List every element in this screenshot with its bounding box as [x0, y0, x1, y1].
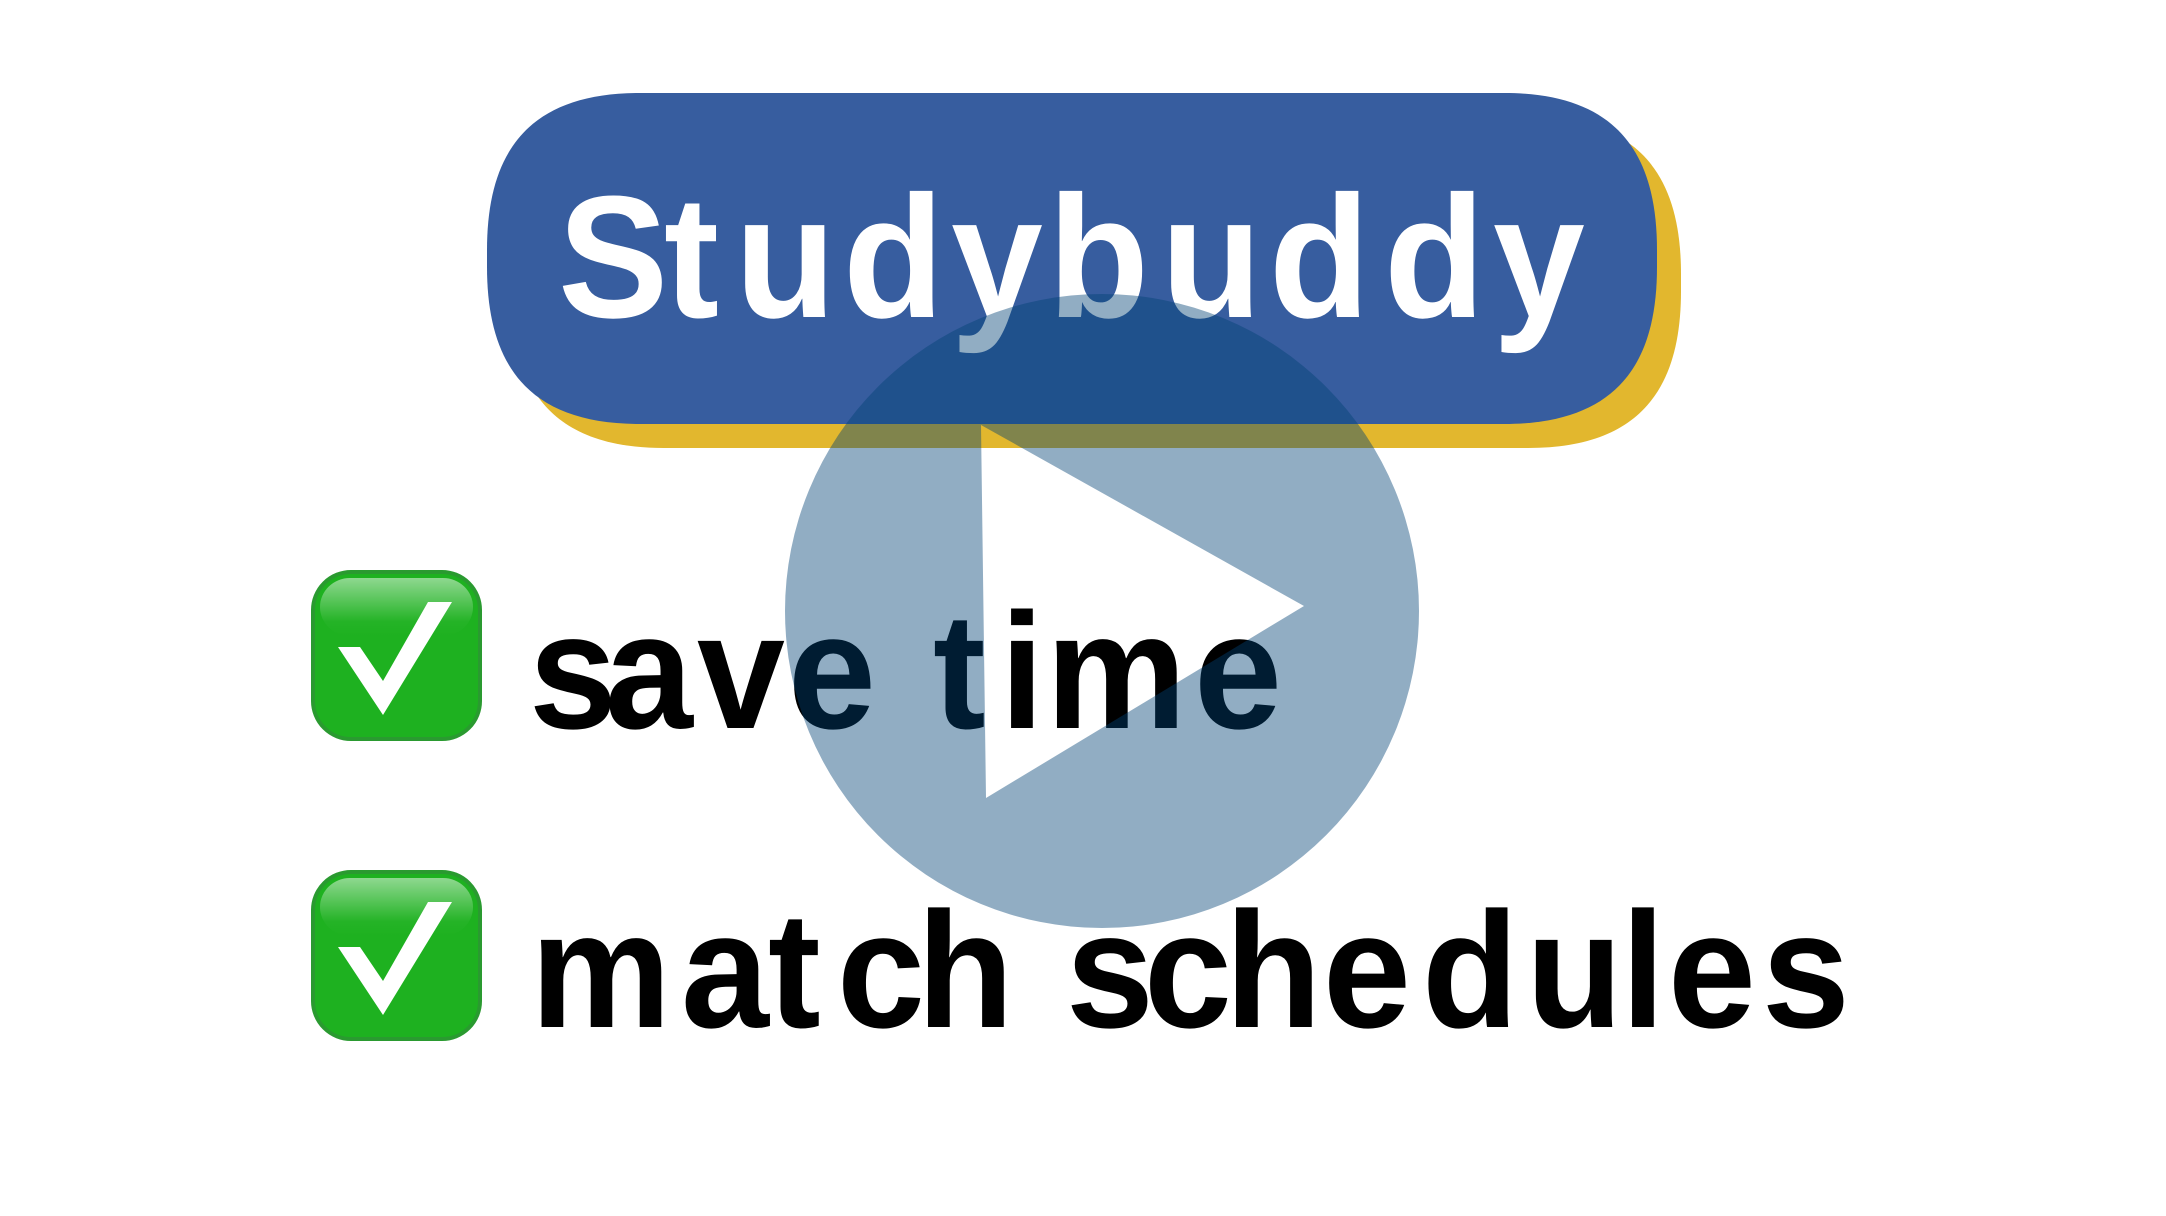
- icon: green check 2: [313, 872, 480, 1039]
- icon: green check 1: [313, 572, 480, 739]
- play button overlay: translucent circle with triangular cutout: [785, 294, 1419, 928]
- badge: blue rounded rectangle: [487, 93, 1657, 424]
- title: Studybuddy: Studybuddy: [558, 159, 1585, 354]
- badge shadow: yellow: [511, 117, 1681, 448]
- text: match schedules: match schedules: [531, 879, 1850, 1063]
- text: save time: save time: [529, 580, 1282, 764]
